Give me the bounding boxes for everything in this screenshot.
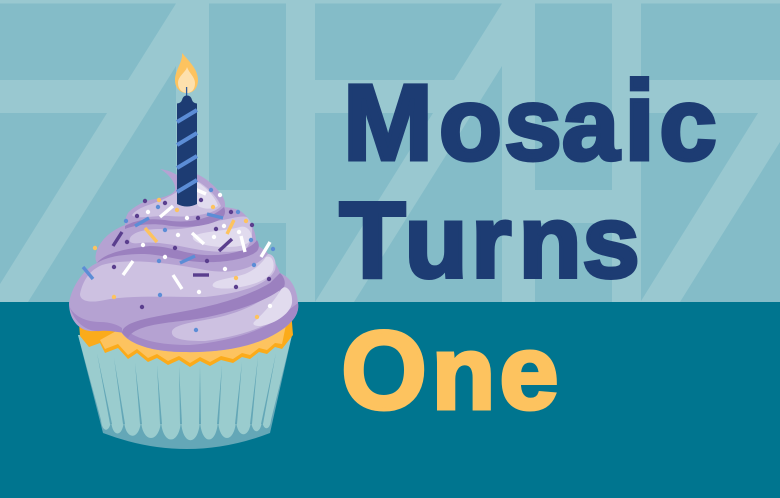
top tier highlight — [195, 182, 218, 209]
title line: Mosaic: s — [504, 66, 562, 182]
title line: Mosaic: i — [624, 58, 655, 184]
title line: Mosaic: M — [343, 62, 433, 182]
second tier crease — [97, 240, 259, 263]
background: mosaic wall pattern — [0, 0, 780, 303]
top tier crease — [125, 207, 225, 229]
title line: Turns: r — [471, 184, 511, 299]
candle — [175, 53, 198, 206]
candle wick — [186, 87, 188, 97]
title line: Mosaic: c — [659, 66, 717, 182]
lower frosting dark rim — [69, 303, 298, 352]
third tier highlight — [213, 257, 274, 289]
icon: birthday cupcake — [69, 53, 298, 449]
frosting silhouette — [69, 169, 298, 352]
second tier highlight — [193, 227, 252, 247]
third tier dark crease — [122, 273, 285, 338]
lower swirl highlight — [253, 287, 292, 326]
candle stripes — [177, 110, 197, 192]
second tier light region — [130, 216, 252, 252]
title line: One: O — [341, 310, 427, 433]
candle body — [177, 96, 197, 206]
frosting swirl — [69, 169, 298, 352]
lower swirl light lobe — [172, 291, 286, 341]
title line: Mosaic: a — [562, 66, 620, 182]
top tier light region — [132, 181, 221, 217]
cake edge: orange zigzag — [78, 310, 293, 367]
title line: Mosaic: o — [439, 66, 502, 182]
sprinkles: hidden white bar behind candle — [190, 187, 206, 194]
title line: Turns: u — [405, 184, 468, 299]
title line: Turns: s — [582, 184, 640, 299]
cake edge: yellow zigzag — [100, 325, 286, 363]
title line: One: e — [500, 314, 558, 432]
title: Mosaic Turns One — [340, 58, 717, 433]
background: teal table band — [0, 302, 780, 498]
title line: Turns: T — [340, 179, 405, 300]
cupcake paper liner — [78, 335, 292, 449]
candle flame — [175, 53, 198, 93]
title line: Turns: n — [519, 184, 582, 299]
third tier light region — [80, 254, 276, 302]
sprinkle dots — [93, 188, 275, 332]
sprinkle bars — [83, 206, 270, 289]
title line: One: n — [432, 316, 495, 432]
